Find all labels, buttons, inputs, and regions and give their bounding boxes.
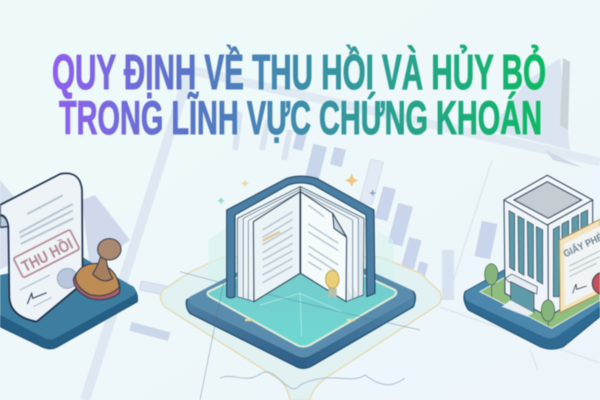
illustration: open book on platform <box>180 173 420 400</box>
book cover <box>227 176 375 298</box>
platform <box>180 245 420 400</box>
stamp mark: THU HỒI: THU HỒI <box>18 234 76 276</box>
glow columns <box>208 227 393 290</box>
trees <box>485 264 555 326</box>
rubber stamp <box>73 239 121 300</box>
highlighted tile around centre platform <box>160 257 441 400</box>
licence certificate <box>559 219 600 313</box>
left page <box>253 192 300 302</box>
seal <box>328 287 337 300</box>
pages <box>237 187 364 302</box>
illustration: recall document and stamp <box>0 173 137 349</box>
title <box>52 45 546 144</box>
illustration: office building and licence <box>464 175 600 349</box>
sparkles <box>217 173 376 204</box>
route line under centre platform <box>220 372 405 389</box>
right page <box>301 192 347 302</box>
building <box>502 175 593 317</box>
bars: centre background chart <box>293 129 428 296</box>
document <box>0 173 83 322</box>
left platform <box>0 258 137 349</box>
platform <box>464 250 600 349</box>
